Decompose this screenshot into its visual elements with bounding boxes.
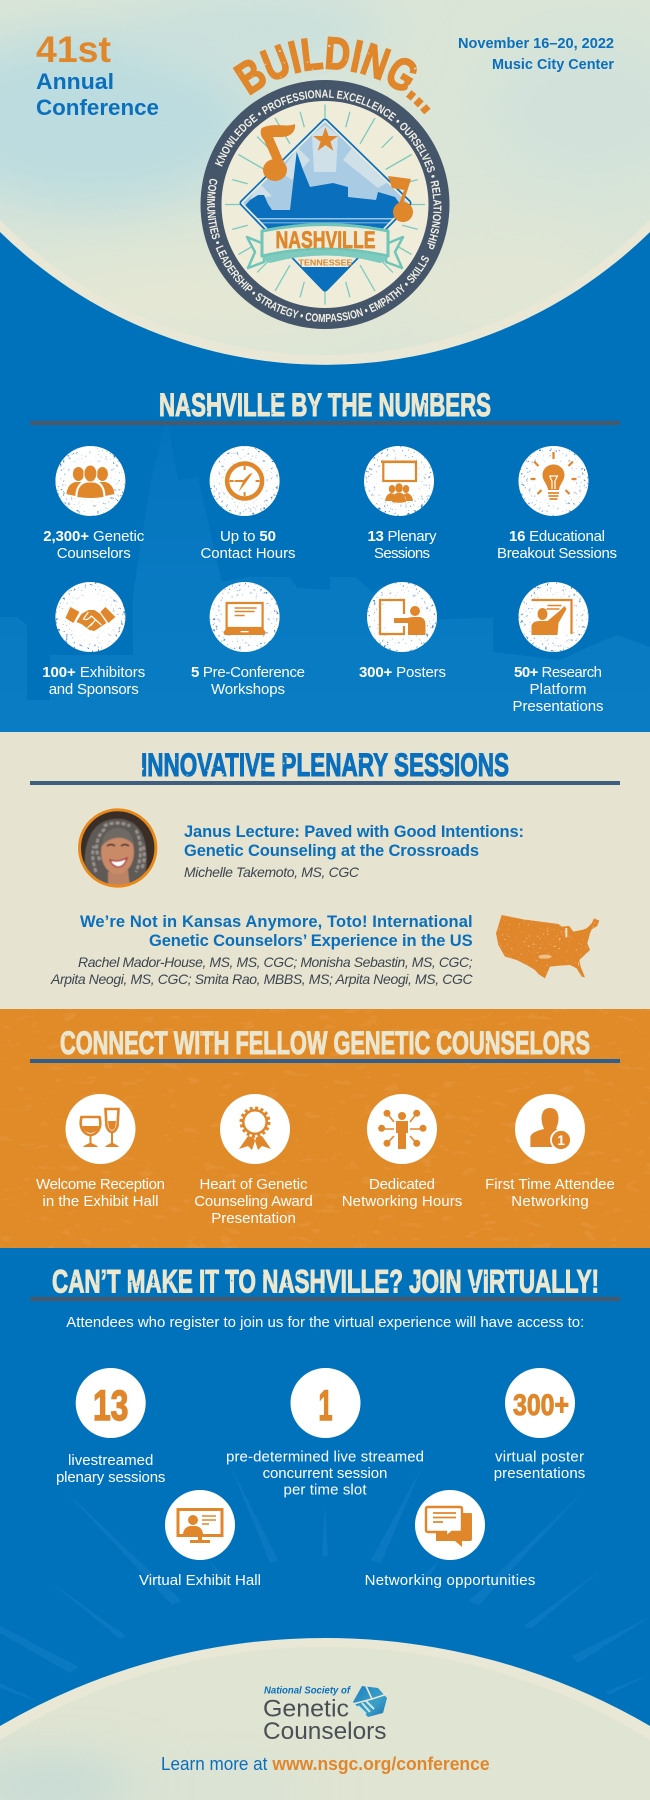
- item: networking opportunities: [365, 1490, 535, 1589]
- label: plenary sessions: [56, 1469, 165, 1486]
- label: Welcome Reception: [36, 1176, 165, 1193]
- item: virtual exhibit hall: [139, 1490, 261, 1589]
- session 1 speaker: Michelle Takemoto, MS, CGC: [184, 864, 360, 880]
- section heading: INNOVATIVE PLENARY SESSIONS: [141, 747, 509, 783]
- background skyline watermark: [0, 425, 650, 732]
- stat: genetic counselors: [43, 446, 145, 562]
- logo music notes: [261, 124, 413, 222]
- label: Sessions: [374, 545, 430, 562]
- label: in the Exhibit Hall: [42, 1193, 158, 1210]
- session 1 title: [184, 823, 524, 860]
- panel: footer arc: [0, 1638, 650, 1800]
- icon: DNA hexagon: [353, 1686, 387, 1717]
- date and venue: [458, 36, 614, 73]
- label: Virtual Exhibit Hall: [139, 1572, 261, 1589]
- label: Workshops: [211, 681, 285, 698]
- number: 1: [318, 1382, 332, 1430]
- label: 13 Plenary: [368, 528, 436, 545]
- label: Counselors: [57, 545, 131, 562]
- item: 13 plenary sessions: [56, 1368, 165, 1486]
- label: Dedicated: [369, 1176, 435, 1193]
- session 2 title: [80, 913, 473, 950]
- section heading: Nashville by the numbers: NASHVILLE BY THE NUMBERS: [159, 387, 491, 423]
- label: Networking Hours: [342, 1193, 462, 1210]
- label: 50+ Research: [514, 664, 602, 681]
- NSGC logo: Genetic: [263, 1696, 349, 1722]
- logo sun rays: [225, 104, 425, 304]
- panel: join virtually: [0, 1264, 650, 1703]
- heading: 41st Annual Conference: Annual: [36, 69, 114, 94]
- item: welcome reception: [36, 1094, 165, 1210]
- icon: person with badge: 1: [557, 1132, 565, 1148]
- icon: screen and audience: [381, 460, 417, 503]
- label: per time slot: [284, 1482, 367, 1498]
- stat: research platform presentations: [512, 582, 604, 715]
- logo title: BUILDING...: BUILDING...: [232, 36, 430, 114]
- number: 300+: [513, 1389, 569, 1422]
- label: livestreamed: [68, 1452, 153, 1469]
- date and venue: Music City Center: [492, 57, 614, 73]
- icon: wine glasses: [81, 1109, 118, 1147]
- NSGC logo: [263, 1684, 387, 1745]
- label: Contact Hours: [200, 545, 296, 562]
- decorative rays: [0, 1465, 650, 1703]
- speaker photo: [78, 808, 158, 888]
- label: Heart of Genetic: [200, 1176, 308, 1193]
- icon: people: [66, 465, 114, 498]
- intro text: Attendees who register to join us for the virtual experience will have access to:: [66, 1314, 584, 1331]
- label: 100+ Exhibitors: [42, 664, 145, 681]
- item: 300+ virtual posters: [494, 1368, 585, 1482]
- heading: 41st Annual Conference: 41st: [36, 29, 111, 70]
- label: 2,300+ Genetic: [43, 528, 144, 545]
- item: dedicated networking hours: [342, 1094, 462, 1210]
- icon: award rosette: [239, 1108, 271, 1150]
- logo ring: COMMUNITIES • LEADERSHIP • STRATEGY • COMPASSION • EMPATHY • SKILLS: [207, 178, 429, 322]
- icon: laptop: [224, 603, 266, 635]
- session 1 title: Janus Lecture: Paved with Good Intentions:: [184, 823, 524, 841]
- item: 1 concurrent session: [226, 1368, 424, 1498]
- NSGC logo: Counselors: [263, 1718, 386, 1745]
- label: presentations: [494, 1465, 585, 1482]
- panel: connect with fellow genetic counselors: [0, 1009, 650, 1248]
- logo diamond with skyline: [240, 120, 410, 292]
- label: 300+ Posters: [359, 664, 446, 681]
- icon: clock: [227, 464, 262, 498]
- label: Networking: [511, 1193, 589, 1210]
- label: 5 Pre-Conference: [191, 664, 305, 681]
- stat: pre-conference workshops: [191, 582, 305, 698]
- label: concurrent session: [263, 1465, 387, 1482]
- learn more link line: www.nsgc.org/conference: [271, 1754, 490, 1774]
- item: heart of genetic counseling award: [194, 1094, 313, 1227]
- heading: 41st Annual Conference: Conference: [36, 95, 159, 120]
- session 2 speakers: [50, 954, 473, 987]
- icon: monitor with person: [178, 1510, 222, 1543]
- number: 13: [93, 1382, 128, 1430]
- label: virtual poster: [495, 1448, 584, 1465]
- session 2 title: We’re Not in Kansas Anymore, Toto! International: [80, 913, 473, 931]
- heading: 41st Annual Conference: [36, 29, 159, 120]
- icon: US map: [496, 915, 599, 978]
- icon: light bulb: [530, 452, 576, 499]
- label: Platform: [530, 681, 586, 698]
- session 2 speakers: Rachel Mador-House, MS, MS, CGC; Monisha Sebastin, MS, CGC;: [78, 954, 473, 970]
- label: and Sponsors: [49, 681, 139, 698]
- date and venue: November 16–20, 2022: [458, 36, 614, 52]
- logo ring: [200, 80, 450, 329]
- panel: header with watercolor arc: [0, 0, 650, 365]
- panel: innovative plenary sessions: [0, 732, 650, 1009]
- label: Presentations: [512, 698, 604, 715]
- label: Counseling Award: [194, 1193, 313, 1210]
- icon: handshake: [65, 607, 115, 631]
- logo text: NASHVILLE: NASHVILLE: [276, 227, 376, 254]
- learn more link line: Learn more at: [161, 1754, 267, 1774]
- learn more link line: [161, 1754, 490, 1774]
- label: Breakout Sessions: [497, 545, 617, 562]
- label: pre-determined live streamed: [226, 1448, 424, 1465]
- session 2 title: Genetic Counselors’ Experience in the US: [149, 932, 473, 950]
- logo ribbon: [247, 224, 403, 268]
- stat: educational breakout sessions: [497, 446, 617, 562]
- logo star: [313, 127, 338, 151]
- session 1 title: Genetic Counseling at the Crossroads: [184, 842, 479, 860]
- label: Up to 50: [220, 528, 276, 545]
- label: 16 Educational: [509, 528, 605, 545]
- stat: contact hours: [200, 446, 296, 562]
- icon: networking person: [378, 1110, 426, 1149]
- label: Networking opportunities: [365, 1572, 535, 1589]
- session 2 speakers: Arpita Neogi, MS, CGC; Smita Rao, MBBS, MS; Arpita Neogi, MS, CGC: [50, 971, 473, 987]
- stat: exhibitors and sponsors: [42, 582, 145, 698]
- icon: speaker at board: [532, 600, 572, 635]
- label: Presentation: [211, 1210, 296, 1227]
- label: First Time Attendee: [485, 1176, 615, 1193]
- icon: chat bubbles: [426, 1507, 472, 1547]
- NSGC logo: National Society of: [264, 1684, 351, 1696]
- stat: posters: [359, 582, 446, 681]
- item: first time attendee networking: [485, 1094, 615, 1210]
- stat: plenary sessions: [364, 446, 437, 562]
- conference logo: Building... Nashville: [200, 36, 450, 329]
- logo text: TENNESSEE: TENNESSEE: [298, 258, 353, 268]
- icon: presenter at poster: [380, 600, 426, 635]
